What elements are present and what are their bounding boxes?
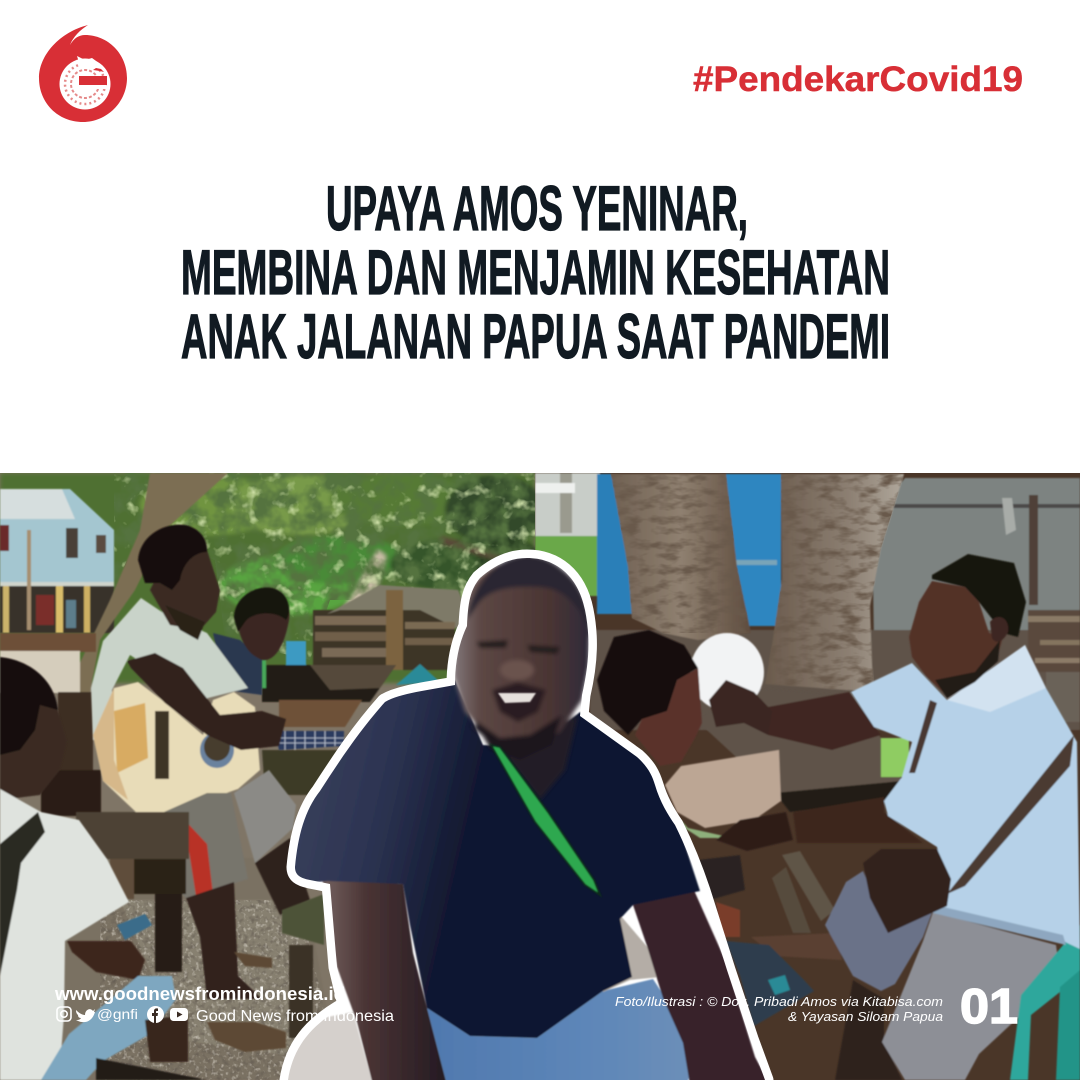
planks: [695, 688, 902, 793]
right arm: [633, 888, 770, 1080]
icon: youtube: [170, 1008, 188, 1021]
channel name: Good News from Indonesia: [196, 1008, 394, 1025]
eyes: [476, 640, 508, 648]
knee: [282, 1012, 373, 1080]
lower arm: [793, 797, 923, 843]
pallets and objects behind: [258, 585, 480, 795]
logo: Good News from Indonesia: [39, 25, 127, 122]
icon: twitter: [76, 1009, 95, 1022]
white sticker outline: [288, 558, 765, 1080]
website footer text: www.goodnewsfromindonesia.id: [54, 983, 345, 1004]
child: [635, 668, 702, 766]
hashtag: #PendekarCovid19: [693, 60, 1023, 99]
green strap: [491, 745, 600, 895]
background gap: [602, 916, 658, 992]
leg: [835, 980, 902, 1080]
photo credit: & Yayasan Siloam Papua: [788, 1010, 943, 1024]
moustache and beard: [492, 682, 546, 722]
photo credit: [615, 995, 943, 1024]
neck: [470, 715, 578, 800]
foliage: [0, 473, 545, 683]
tee shirt: [285, 680, 700, 1038]
sky and grass: [535, 473, 600, 538]
photo: Amos feeding a child: [535, 473, 1080, 1080]
photo: Amos playing guitar with street children: [0, 473, 545, 1080]
social icons: [57, 1006, 188, 1023]
fence: [872, 478, 1080, 641]
blue walls: [597, 474, 637, 614]
seated boy with strap: [0, 657, 324, 1080]
nose: [500, 660, 534, 680]
shirt: [851, 645, 1080, 949]
house: [0, 489, 114, 633]
man with guitar: [76, 525, 344, 1052]
title: UPAYA AMOS YENINAR,: [326, 174, 748, 244]
shorts light part: [882, 912, 1060, 1080]
hair: [467, 555, 592, 640]
icon: facebook: [147, 1006, 164, 1023]
dome: [690, 633, 764, 711]
teeth: [498, 693, 536, 703]
shorts dark part: [825, 871, 933, 991]
icon: instagram: [57, 1007, 71, 1021]
page number: 01: [960, 980, 1018, 1034]
head: [909, 581, 1003, 696]
cutout: portrait of Amos Yeninar: [282, 555, 770, 1080]
logs below: [782, 851, 835, 921]
jeans: [427, 979, 697, 1080]
patterned cloth: [726, 941, 814, 1026]
left arm: [322, 878, 447, 1080]
social handle: @gnfi: [97, 1006, 138, 1022]
upper arm: [768, 692, 881, 750]
head: [453, 558, 590, 750]
bag and plate: [665, 750, 781, 828]
ground: [590, 630, 1080, 730]
chair: [1010, 925, 1080, 1080]
title: [181, 174, 890, 372]
photo credit: Foto/Ilustrasi : © Dok. Pribadi Amos via Kitabisa.com: [615, 995, 943, 1009]
ground, log and trunk: [0, 473, 305, 1054]
trunks: [611, 474, 751, 640]
hand: [709, 680, 772, 735]
straps and bag: [947, 735, 1074, 894]
